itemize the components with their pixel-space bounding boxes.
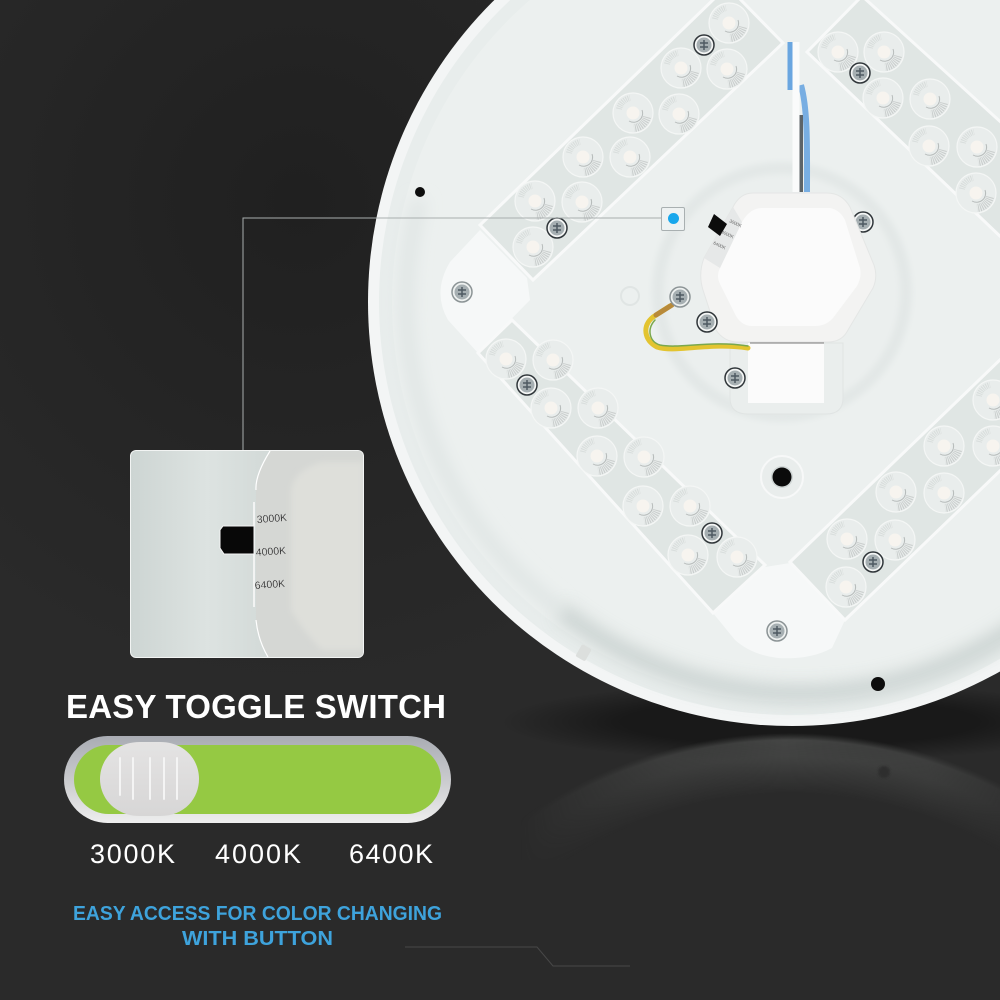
kelvin labels: 6400K xyxy=(254,578,286,592)
blue caption: EASY ACCESS FOR COLOR CHANGING xyxy=(73,902,442,925)
tiny kelvin labels: 3000K xyxy=(729,218,742,228)
heading: EASY TOGGLE SWITCH xyxy=(66,688,446,725)
round mount xyxy=(652,162,912,422)
temperature labels: 3000K xyxy=(90,839,175,869)
LED strip: top left xyxy=(480,0,783,280)
tiny kelvin labels: 6400K xyxy=(713,240,726,250)
lamp shadow xyxy=(500,682,1000,762)
lamp lower shading xyxy=(406,200,1000,694)
reflection glow under the lamp xyxy=(584,734,1000,810)
lamp outer rim xyxy=(368,0,1000,726)
kelvin labels xyxy=(254,512,288,592)
blue caption xyxy=(73,902,442,950)
black dots xyxy=(415,187,885,691)
lamp dish xyxy=(379,0,1000,715)
faint logo xyxy=(621,287,639,305)
toggle slider graphic xyxy=(64,736,451,823)
temperature labels xyxy=(90,839,433,869)
LED strip: bottom left xyxy=(478,320,765,613)
junction box hexagon xyxy=(701,193,876,342)
kelvin labels: 3000K xyxy=(256,512,288,526)
temperature labels: 4000K xyxy=(215,839,301,869)
toggle slot xyxy=(220,526,254,554)
tiny kelvin labels xyxy=(714,220,742,250)
LED strip: bottom right xyxy=(790,356,1000,620)
temperature labels: 6400K xyxy=(349,839,433,869)
LED strip: top right xyxy=(807,0,1000,240)
frame screws xyxy=(452,212,873,641)
callout blue marker xyxy=(662,208,684,230)
mounting hole xyxy=(761,456,803,498)
tiny kelvin labels: 4000K xyxy=(721,229,734,239)
kelvin labels: 4000K xyxy=(255,545,287,559)
reflected dot xyxy=(878,766,890,778)
terminal block xyxy=(730,343,843,414)
panel: switch close-up xyxy=(130,450,364,658)
frame corner: left xyxy=(440,230,530,353)
frame corner: bottom xyxy=(713,563,845,658)
wires xyxy=(790,42,807,192)
blue caption: WITH BUTTON xyxy=(182,927,333,950)
knob xyxy=(100,742,199,816)
callout line xyxy=(243,218,661,450)
small tab on rim xyxy=(576,645,591,661)
earth wire xyxy=(646,305,748,349)
toggle switch on box xyxy=(708,214,727,236)
lamp photo xyxy=(368,0,1000,726)
